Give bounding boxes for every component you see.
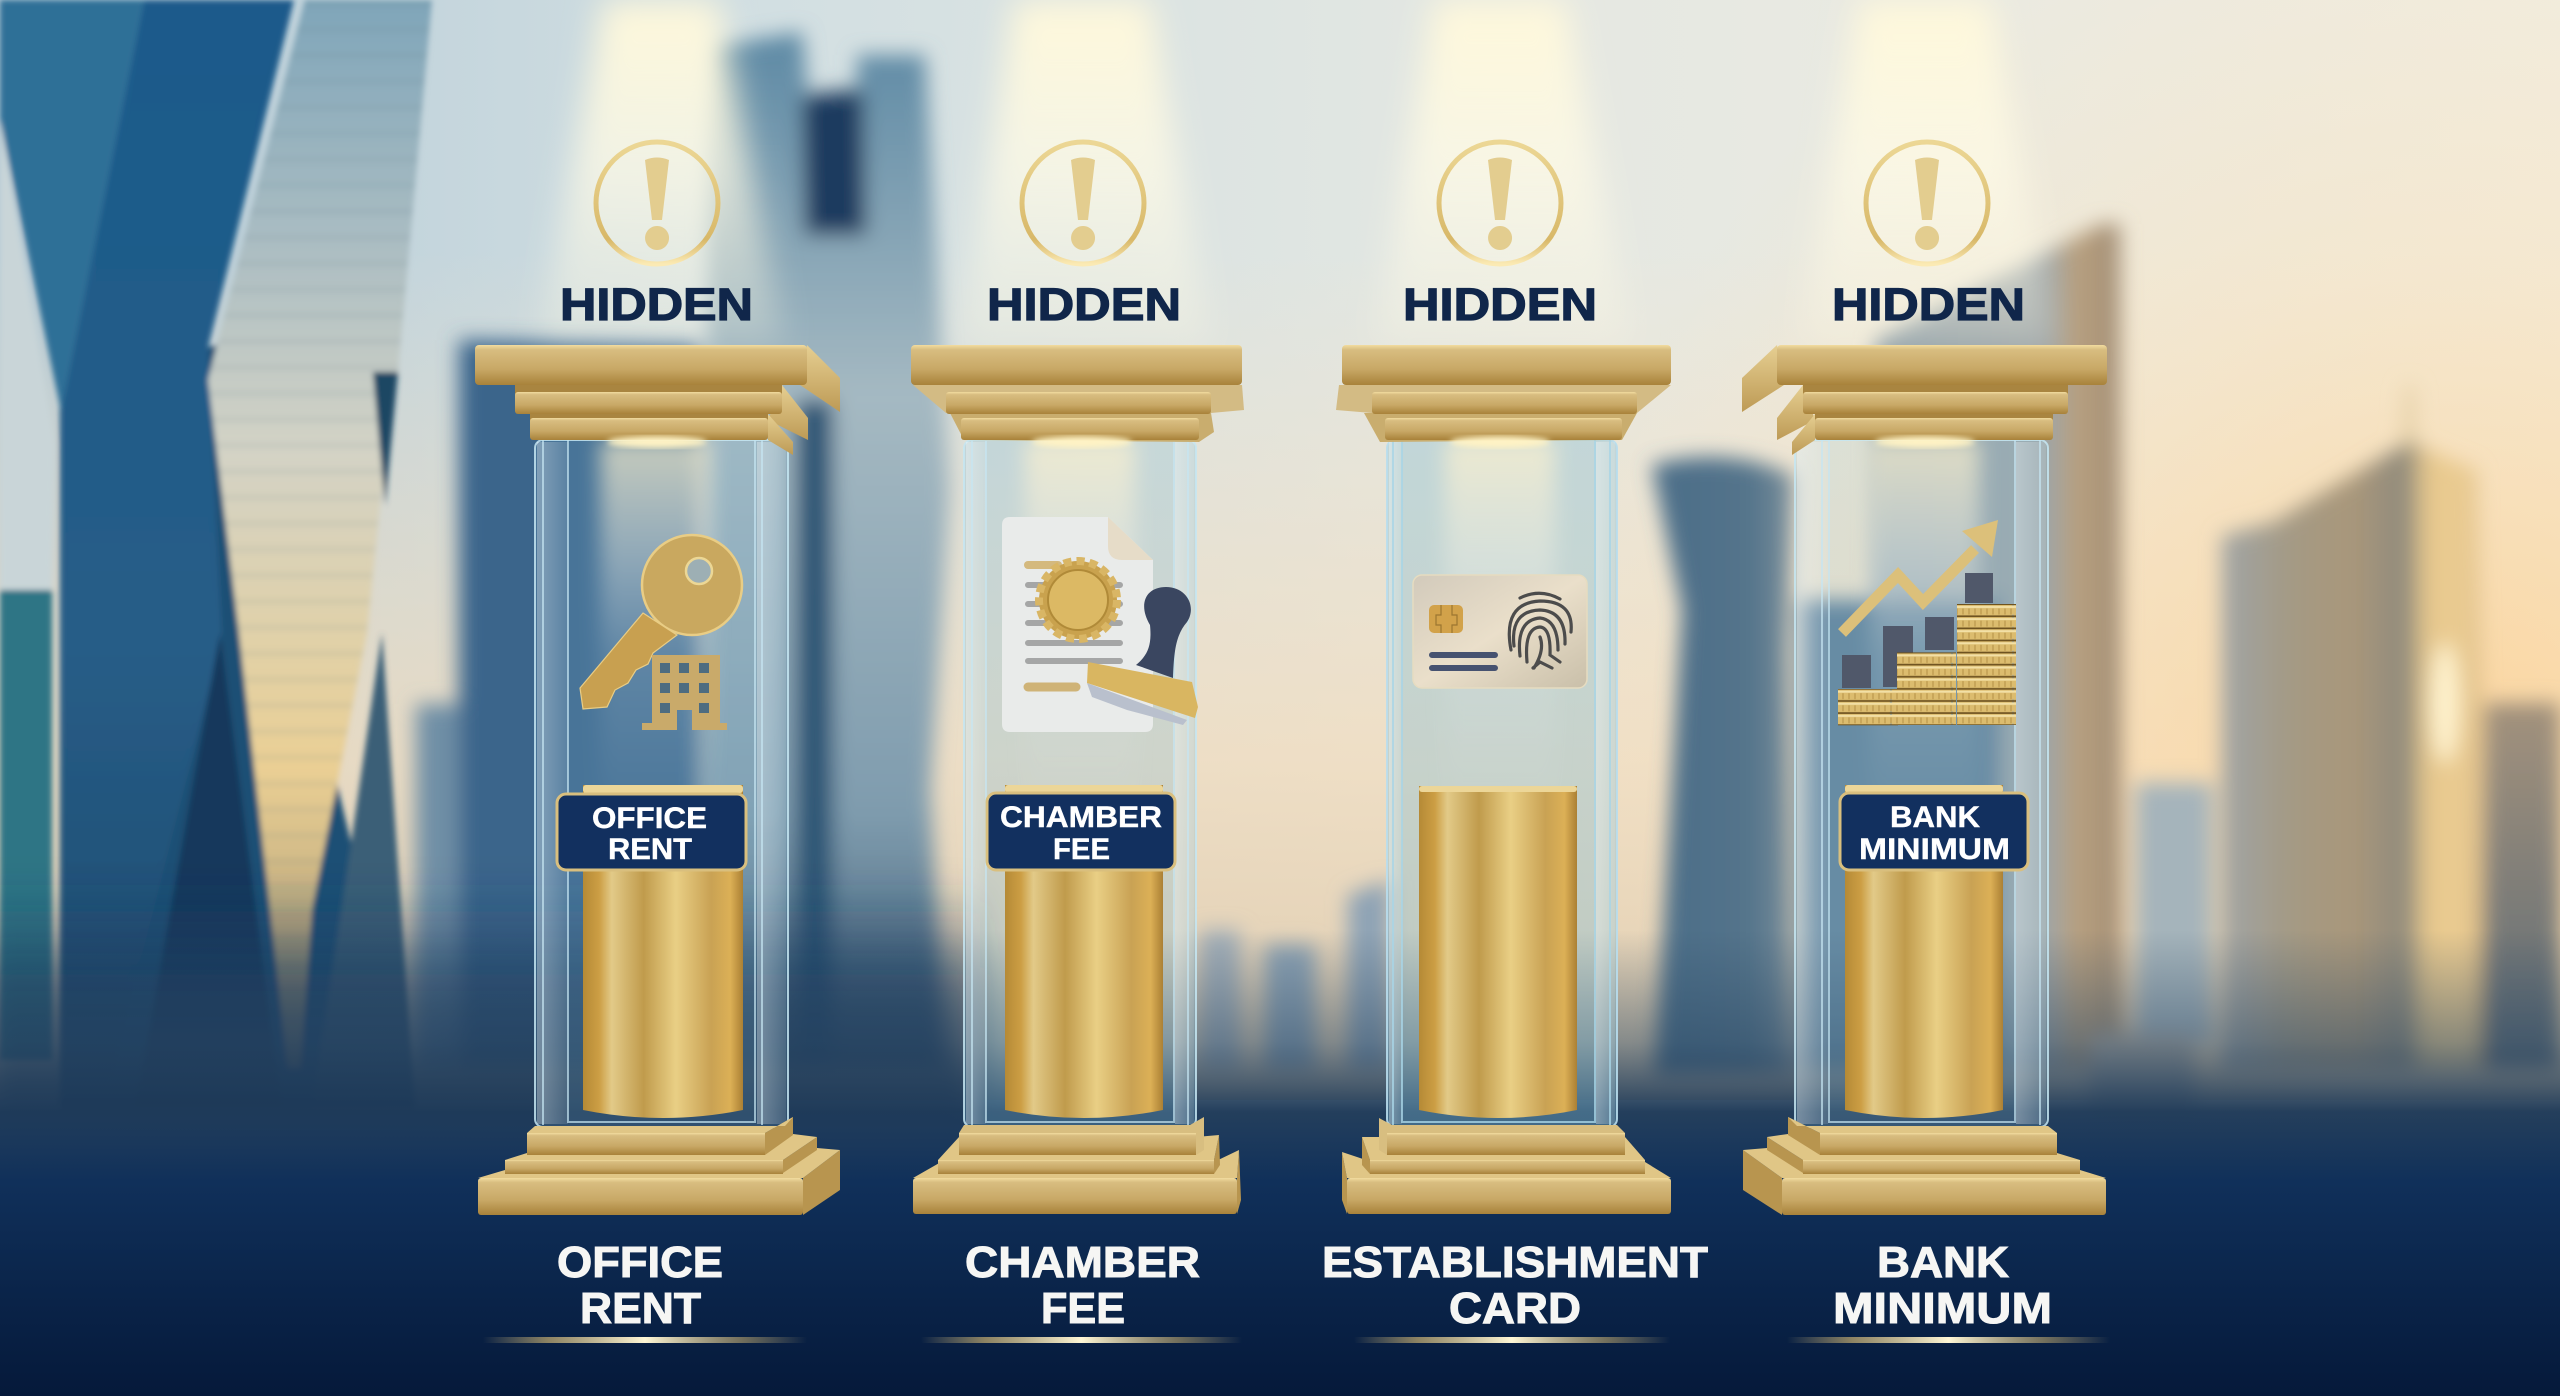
gold cylinder xyxy=(1845,785,2003,1118)
spotlight beams xyxy=(539,0,2055,345)
caption xyxy=(483,1238,807,1343)
base xyxy=(913,1117,1241,1214)
caption xyxy=(921,1238,1242,1343)
icon: rising chart with coins xyxy=(1838,520,2016,725)
gold cylinder xyxy=(1419,786,1577,1118)
icon: document with seal and stamp xyxy=(1002,517,1198,732)
pillar 1: office rent xyxy=(475,142,840,1343)
icon: card with fingerprint xyxy=(1413,575,1587,688)
hidden label: HIDDEN xyxy=(1403,279,1597,330)
glass case xyxy=(535,440,788,1127)
caption xyxy=(1787,1238,2110,1343)
hidden label: HIDDEN xyxy=(560,279,753,330)
pillar 2: chamber fee xyxy=(911,142,1244,1343)
alert icon xyxy=(1866,142,1988,264)
plaque: RENT xyxy=(608,833,692,866)
glass case xyxy=(1387,440,1617,1127)
plaque xyxy=(1840,793,2028,870)
base xyxy=(1743,1117,2106,1215)
caption: CARD xyxy=(1449,1284,1581,1333)
alert icon xyxy=(1439,142,1561,264)
hidden label: HIDDEN xyxy=(987,279,1181,330)
caption: OFFICE xyxy=(557,1238,723,1287)
plaque: MINIMUM xyxy=(1859,833,2010,866)
capital xyxy=(1742,345,2107,455)
caption xyxy=(1322,1238,1708,1343)
alert icon xyxy=(1022,142,1144,264)
capital xyxy=(911,345,1244,448)
gold cylinder xyxy=(583,785,743,1118)
plaque xyxy=(987,793,1175,870)
alert icon xyxy=(596,142,718,264)
plaque: BANK xyxy=(1890,801,1980,834)
caption: CHAMBER xyxy=(965,1238,1200,1287)
glass case xyxy=(964,440,1196,1127)
plaque: FEE xyxy=(1053,833,1110,866)
plaque xyxy=(557,794,746,870)
base xyxy=(478,1117,840,1215)
caption: MINIMUM xyxy=(1833,1284,2052,1333)
capital xyxy=(1336,345,1671,448)
pillar 3: establishment card xyxy=(1322,142,1708,1343)
gold cylinder xyxy=(1005,785,1163,1118)
plaque: CHAMBER xyxy=(1000,801,1162,834)
icon: key and building xyxy=(580,535,742,730)
capital xyxy=(475,345,840,455)
caption: ESTABLISHMENT xyxy=(1322,1238,1708,1287)
pillar 4: bank minimum xyxy=(1742,142,2110,1343)
glass case xyxy=(1795,440,2048,1127)
base xyxy=(1342,1118,1671,1214)
plaque: OFFICE xyxy=(592,802,707,835)
caption: RENT xyxy=(580,1284,701,1333)
caption: FEE xyxy=(1041,1284,1125,1333)
caption: BANK xyxy=(1877,1238,2009,1287)
hidden label: HIDDEN xyxy=(1832,279,2025,330)
